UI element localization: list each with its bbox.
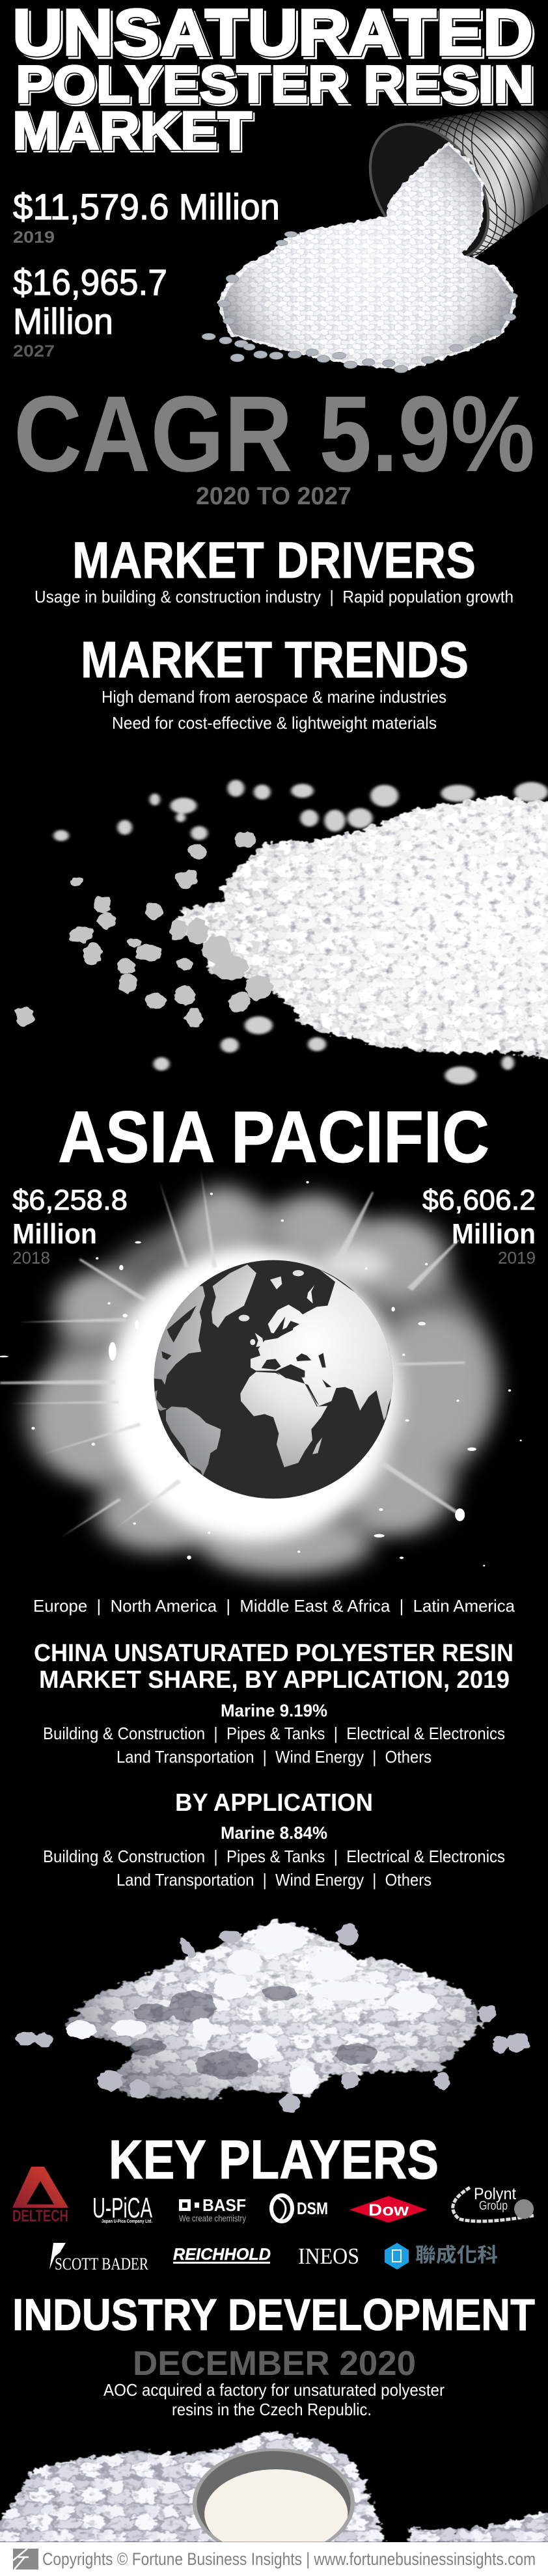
logo: polynt group: Polynt <box>474 2185 516 2203</box>
logo: ineos: INEOS <box>298 2244 359 2269</box>
market trends line 2: Need for cost-effective & lightweight materials <box>112 713 437 733</box>
stat: 2027 year: 2027 <box>13 342 55 360</box>
logo: dsm <box>271 2195 328 2221</box>
shadow gaps <box>130 1986 377 2079</box>
logo: basf <box>179 2195 246 2223</box>
globe <box>152 1260 395 1498</box>
stat: asia pacific 2018 unit: Million <box>12 1218 97 1250</box>
land: north america <box>152 1286 205 1385</box>
logo: dsm: DSM <box>297 2199 328 2218</box>
explosion cloud <box>0 1171 522 1575</box>
date: DECEMBER 2020 <box>133 2344 416 2383</box>
heading: by application: BY APPLICATION <box>175 1789 373 1817</box>
sea: black sea <box>296 1353 311 1361</box>
stat: asia pacific 2019 value: $6,606.2 <box>422 1184 536 1216</box>
land: britain <box>255 1333 264 1347</box>
illustration: globe with explosion <box>0 1171 522 1575</box>
sea: baltic <box>273 1316 294 1338</box>
logo: scott bader <box>49 2243 149 2273</box>
stat: 2027 value: $16,965.7 <box>13 262 167 303</box>
heading: china market share line 2: MARKET SHARE, BY APPLICATION, 2019 <box>39 1666 510 1694</box>
heading: asia pacific: ASIA PACIFIC <box>58 1096 489 1178</box>
market trends line 1: High demand from aerospace & marine industries <box>102 687 446 707</box>
logo: dow <box>349 2196 427 2223</box>
title line 3: MARKET <box>14 102 254 163</box>
heading: china market share line 1: CHINA UNSATURATED POLYESTER RESIN <box>34 1640 514 1667</box>
logo: u-pica <box>92 2192 152 2224</box>
illustration: jar spilling resin pellets <box>202 111 548 373</box>
title <box>12 0 536 163</box>
development text line 2: resins in the Czech Republic. <box>172 2400 372 2419</box>
other regions list: Europe | North America | Middle East & Africa | Latin America <box>33 1596 515 1616</box>
logo: dow: Dow <box>368 2201 409 2219</box>
market drivers text: Usage in building & construction industry | Rapid population growth <box>34 587 514 606</box>
light rays <box>0 1171 465 1537</box>
title line 2: POLYESTER RESIN <box>16 55 534 114</box>
stat: asia pacific 2019 unit: Million <box>452 1218 536 1250</box>
footer logo <box>13 2549 38 2569</box>
by application list line 1: Building & Construction | Pipes & Tanks | Electrical & Electronics <box>43 1847 505 1866</box>
logo: u-pica: Japan U-Pica Company Ltd. <box>102 2219 152 2224</box>
stat: asia pacific 2018 value: $6,258.8 <box>12 1184 128 1216</box>
logo: basf: We create chemistry <box>179 2213 246 2223</box>
stat: asia pacific 2018 year: 2018 <box>12 1248 50 1268</box>
right crystals <box>409 2510 548 2553</box>
land: madagascar <box>312 1437 322 1454</box>
footer bar <box>0 2542 548 2576</box>
jar body <box>411 111 548 258</box>
bowl <box>195 2450 353 2558</box>
logo: basf: BASF <box>202 2195 246 2215</box>
sea: hudson bay <box>167 1306 197 1342</box>
illustration: crystal pile <box>15 1919 530 2113</box>
by application marine share: Marine 8.84% <box>221 1823 327 1843</box>
illustration: bowl of crystals <box>0 2432 548 2558</box>
logo: deltech <box>12 2167 68 2225</box>
sea: great lakes <box>161 1351 171 1360</box>
land: ireland <box>250 1339 255 1345</box>
land: novaya zemlya <box>307 1285 314 1303</box>
stat: asia pacific 2019 year: 2019 <box>498 1248 536 1268</box>
land: eurasia <box>251 1270 395 1420</box>
sea: persian gulf <box>322 1379 331 1387</box>
stat: 2027 unit: Million <box>13 301 113 342</box>
logo: deltech: DELTECH <box>12 2207 68 2225</box>
blurred flying crystals <box>53 780 548 1085</box>
development text line 1: AOC acquired a factory for unsaturated polyester <box>103 2380 445 2400</box>
pellet pile <box>202 142 517 373</box>
illustration: resin crystals heap <box>15 780 548 1085</box>
logo: u-pica: U-PiCA <box>92 2192 152 2224</box>
title line 2: POLYESTER RESIN <box>16 55 534 114</box>
title line 3: MARKET <box>12 100 252 161</box>
stat: 2019 value: $11,579.6 Million <box>13 186 280 227</box>
china applications line 1: Building & Construction | Pipes & Tanks | Electrical & Electronics <box>43 1724 505 1743</box>
china marine share: Marine 9.19% <box>221 1701 327 1720</box>
stat: 2019 year: 2019 <box>13 228 55 247</box>
by application list line 2: Land Transportation | Wind Energy | Others <box>116 1870 432 1890</box>
sea: caspian <box>318 1353 326 1368</box>
title line 1: UNSATURATED <box>15 0 536 72</box>
heading: key players: KEY PLAYERS <box>109 2129 439 2190</box>
sparks <box>0 1181 522 1567</box>
land: africa <box>240 1372 327 1467</box>
land: central america <box>155 1390 167 1411</box>
land: greenland <box>212 1264 256 1328</box>
china applications line 2: Land Transportation | Wind Energy | Others <box>116 1747 432 1767</box>
title line 3: MARKET <box>12 100 252 161</box>
logo: polynt group: Group <box>479 2199 508 2213</box>
pile mass <box>63 1919 482 2100</box>
crystal mass <box>171 796 548 1060</box>
land: franz josef <box>293 1270 304 1276</box>
heading: market drivers: MARKET DRIVERS <box>72 531 476 589</box>
title line 2: POLYESTER RESIN <box>18 57 536 116</box>
bright chunks <box>66 1924 437 2095</box>
logo: chang chun: 聯成化科 <box>415 2239 498 2268</box>
logo: chang chun <box>385 2239 498 2270</box>
land: south america <box>166 1407 221 1476</box>
loose crystals <box>15 1924 530 2113</box>
sea: mediterranean east <box>275 1364 305 1378</box>
sharp loose crystals <box>15 832 273 1028</box>
heading: market trends: MARKET TRENDS <box>81 630 469 688</box>
sea: red sea <box>305 1384 320 1406</box>
jar mouth <box>346 103 513 280</box>
CAGR period: 2020 TO 2027 <box>196 483 351 510</box>
left crystals <box>0 2432 388 2553</box>
logo: reichhold: REICHHOLD <box>173 2245 271 2264</box>
logo: polynt group <box>453 2185 534 2221</box>
sea: mediterranean west <box>262 1359 281 1370</box>
logo: scott bader: SCOTT BADER <box>55 2255 149 2273</box>
land: iceland <box>239 1315 249 1322</box>
land: svalbard <box>270 1277 282 1290</box>
